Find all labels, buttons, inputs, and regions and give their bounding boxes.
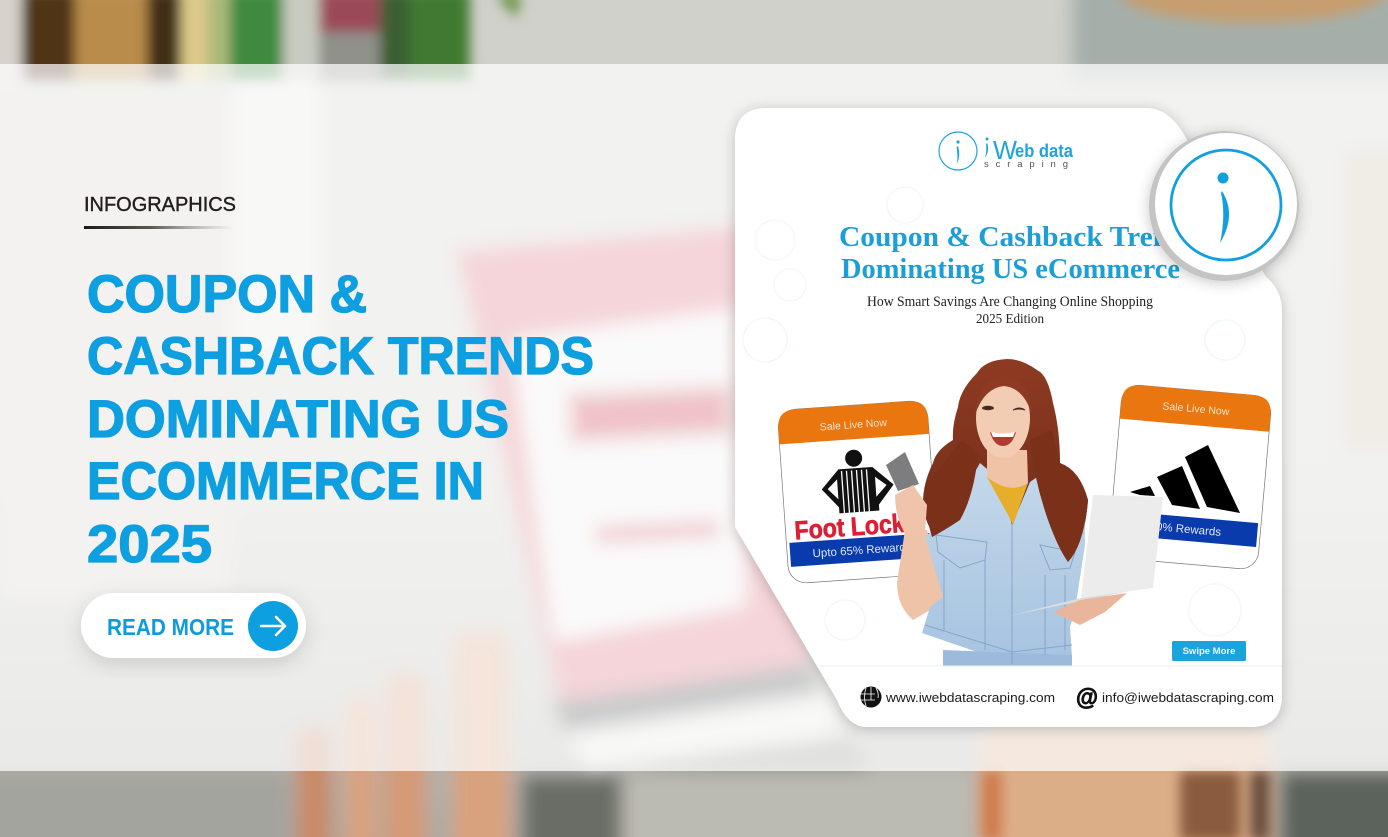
hair front locks [926,440,978,537]
main heading: CASHBACK TRENDS [87,327,594,386]
icon: at sign: @ [1076,684,1098,710]
coupon: foot locker [777,400,939,584]
jeans hem [943,650,1072,666]
yellow shirt [987,477,1028,525]
jacket details [925,525,1075,664]
round logo badge [1149,131,1299,281]
label: infographics: INFOGRAPHICS [84,194,236,216]
card title [839,221,1197,285]
coupon: foot locker: Sale Live Now [819,417,888,433]
coupon: adidas: 40% Rewards [1149,521,1222,539]
read more button [81,593,306,658]
label: infographics [84,194,236,229]
main heading: 2025 [87,515,212,574]
hands [296,725,332,837]
coupon: adidas: Sale Live Now [1162,400,1230,418]
right hand [1053,593,1127,625]
card subtitle: How Smart Savings Are Changing Online Shopping [867,294,1153,310]
neck [987,450,1028,488]
woman with card and laptop [886,359,1163,666]
icon: globe [860,686,882,708]
swipe more button [1172,641,1246,661]
left arm [897,530,945,620]
hair parting [975,376,1032,415]
logo: eb data [1015,141,1074,161]
coupon: adidas [1108,384,1272,570]
coupon: foot locker: Upto 65% Rewards [812,541,912,560]
card subtitle [867,294,1153,326]
face [976,378,1030,458]
main heading: COUPON & [87,265,367,324]
hair back [923,359,1088,562]
coupon: foot locker: Foot Locker [793,506,927,545]
credit card [886,452,919,491]
smile [990,432,1016,446]
read more button: READ MORE [107,614,234,640]
card base [735,108,1282,727]
swipe more button: Swipe More [1183,646,1235,657]
main heading [87,265,594,574]
promo card [735,108,1282,727]
faint doodle background [743,187,1245,640]
laptop [1081,495,1163,598]
main heading: ECOMMERCE IN [87,452,484,511]
card title: Coupon & Cashback Trends [839,221,1197,253]
logo [939,132,1074,170]
logo: scraping [984,159,1068,170]
eyes [982,406,1025,410]
footer band: info@iwebdatascraping.com [1102,690,1274,705]
card subtitle: 2025 Edition [976,311,1044,326]
main heading: DOMINATING US [87,390,509,449]
logo: W [993,135,1017,165]
footer band: www.iwebdatascraping.com [885,690,1055,705]
tablet [455,222,812,705]
footer band [819,666,1282,727]
jacket [922,463,1085,664]
referee logo [819,447,895,514]
card title: Dominating US eCommerce [841,253,1180,285]
raising hand [895,485,927,535]
three stripes logo [1130,445,1240,513]
